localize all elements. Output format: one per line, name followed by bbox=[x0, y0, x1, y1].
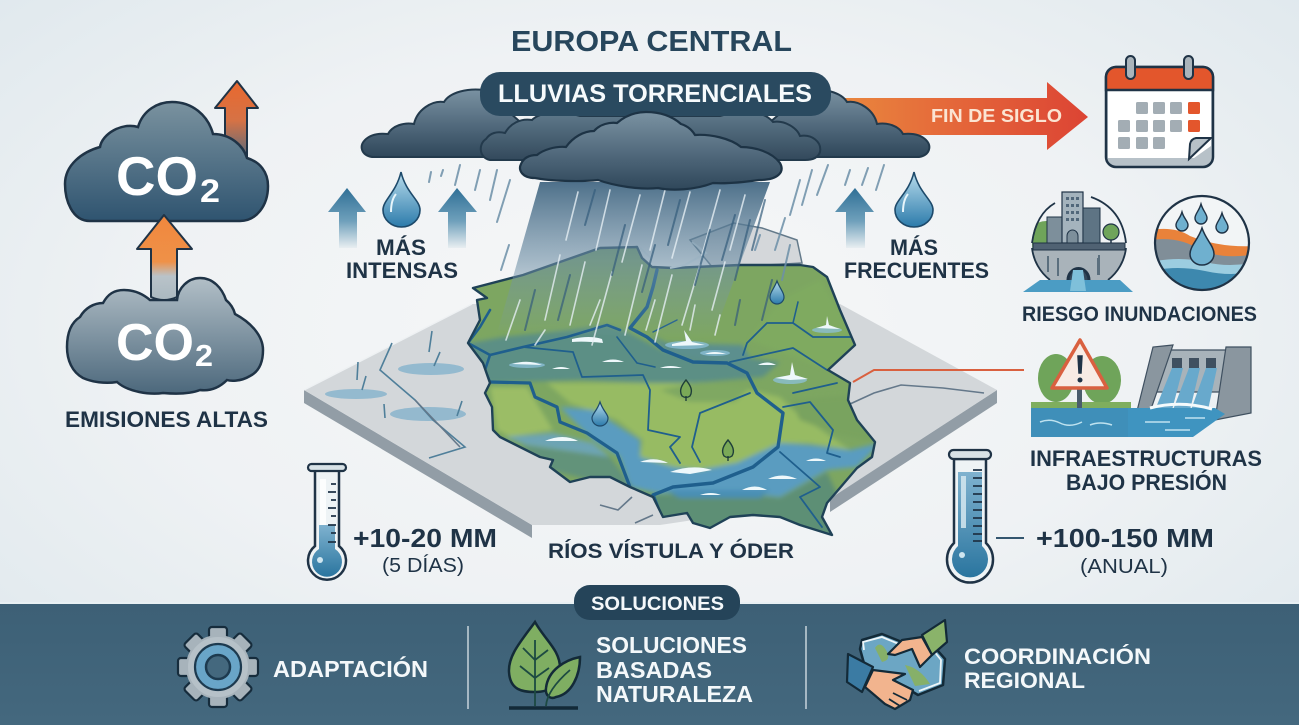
label: more intense: INTENSAS bbox=[346, 258, 458, 283]
icon: upper CO2 cloud: 2 bbox=[200, 173, 220, 209]
connector dash bbox=[996, 537, 1024, 539]
icon: upper CO2 cloud bbox=[65, 102, 268, 221]
label: rivers: RÍOS VÍSTULA Y ÓDER bbox=[548, 539, 794, 563]
panel: short-term rainfall bbox=[308, 464, 497, 580]
panel: annual rainfall bbox=[947, 450, 1214, 583]
value: +10-20 mm: (5 DÍAS) bbox=[382, 554, 464, 577]
pill: solutions heading bbox=[574, 585, 740, 620]
label: adaptation: ADAPTACIÓN bbox=[273, 655, 428, 682]
Poland map bbox=[460, 235, 880, 545]
panel: storm clouds bbox=[362, 72, 929, 190]
connector line bbox=[853, 370, 1024, 382]
value: +100-150 mm: (ANUAL) bbox=[1080, 556, 1168, 578]
label: infrastructure: INFRAESTRUCTURAS bbox=[1030, 446, 1262, 471]
icon: dam with water release bbox=[1128, 345, 1251, 437]
icon: flooded city bbox=[1023, 192, 1133, 295]
Baltic coast spit bbox=[640, 242, 706, 268]
arrow: up, left bbox=[328, 188, 366, 248]
label: regional coordination: REGIONAL bbox=[964, 668, 1085, 693]
arrow: up, right bbox=[438, 188, 477, 248]
panel: more intense bbox=[328, 172, 477, 283]
label: more frequent: FRECUENTES bbox=[844, 258, 989, 283]
label: infrastructure bbox=[1030, 446, 1262, 495]
icon: water drop left bbox=[383, 172, 420, 227]
map details: drops and trees bbox=[592, 281, 784, 461]
label: more frequent: MÁS bbox=[890, 235, 938, 260]
icon: lower CO2 cloud: CO bbox=[116, 314, 194, 372]
icon: upper CO2 cloud: CO bbox=[116, 145, 198, 207]
panel: solutions band bbox=[0, 585, 1299, 725]
label: regional coordination: COORDINACIÓN bbox=[964, 644, 1151, 669]
rain column bbox=[429, 165, 884, 345]
icon: leaves bbox=[509, 622, 580, 708]
icon: water drop right bbox=[895, 172, 933, 227]
panel: more frequent bbox=[835, 172, 989, 283]
panel: flood risk bbox=[1022, 192, 1257, 326]
arrow: up bbox=[835, 188, 874, 248]
pill: headline bbox=[480, 72, 831, 116]
panel: emissions bbox=[65, 81, 268, 432]
value: +100-150 mm: +100-150 MM bbox=[1036, 523, 1214, 553]
rivers bbox=[468, 270, 852, 527]
icon: warning sign by flooded river bbox=[1031, 340, 1131, 437]
icon: gear bbox=[178, 627, 258, 707]
pill: solutions heading: SOLUCIONES bbox=[591, 594, 724, 615]
icon: handshake over map bbox=[847, 620, 947, 709]
divider bbox=[468, 626, 806, 709]
label: regional coordination bbox=[964, 644, 1151, 693]
centre rear cloud bbox=[481, 112, 820, 160]
label: more frequent bbox=[844, 235, 989, 283]
icon: thermometer right bbox=[947, 450, 993, 583]
label: more intense bbox=[346, 235, 458, 283]
water glints bbox=[509, 327, 842, 384]
value: +10-20 mm bbox=[353, 523, 497, 577]
icon: calendar bbox=[1106, 56, 1213, 167]
value: +10-20 mm: +10-20 MM bbox=[353, 523, 497, 553]
label: nature-based solutions: NATURALEZA bbox=[596, 681, 753, 707]
pill: headline: LLUVIAS TORRENCIALES bbox=[498, 80, 812, 108]
arrow: end of century bbox=[830, 82, 1088, 150]
label: infrastructure: BAJO PRESIÓN bbox=[1066, 470, 1227, 495]
panel: infrastructure under pressure bbox=[853, 340, 1262, 495]
title: EUROPA CENTRAL bbox=[511, 26, 792, 58]
platform base bbox=[304, 304, 997, 538]
icon: thermometer left bbox=[308, 464, 346, 580]
value: +100-150 mm bbox=[1036, 523, 1214, 578]
label: nature-based solutions bbox=[596, 632, 753, 707]
icon: lower CO2 cloud: 2 bbox=[195, 338, 213, 373]
label: flood risk: RIESGO INUNDACIONES bbox=[1022, 303, 1257, 326]
label: emissions: EMISIONES ALTAS bbox=[65, 407, 268, 432]
label: nature-based solutions: SOLUCIONES bbox=[596, 632, 747, 658]
panel: map platform and Poland bbox=[304, 165, 997, 545]
label: more intense: MÁS bbox=[376, 235, 426, 260]
icon: rain on river bbox=[1150, 196, 1255, 295]
icon: lower CO2 cloud bbox=[67, 278, 263, 394]
band background bbox=[0, 604, 1299, 725]
front cloud bbox=[520, 112, 782, 190]
label: nature-based solutions: BASADAS bbox=[596, 657, 712, 683]
arrow: rising emissions, middle bbox=[137, 215, 192, 300]
arrow: rising emissions, upper bbox=[215, 81, 258, 160]
arrow: end of century: FIN DE SIGLO bbox=[931, 106, 1062, 126]
gray neighbouring territory bbox=[690, 223, 802, 268]
left cloud bbox=[362, 90, 560, 157]
right cloud bbox=[730, 90, 929, 157]
